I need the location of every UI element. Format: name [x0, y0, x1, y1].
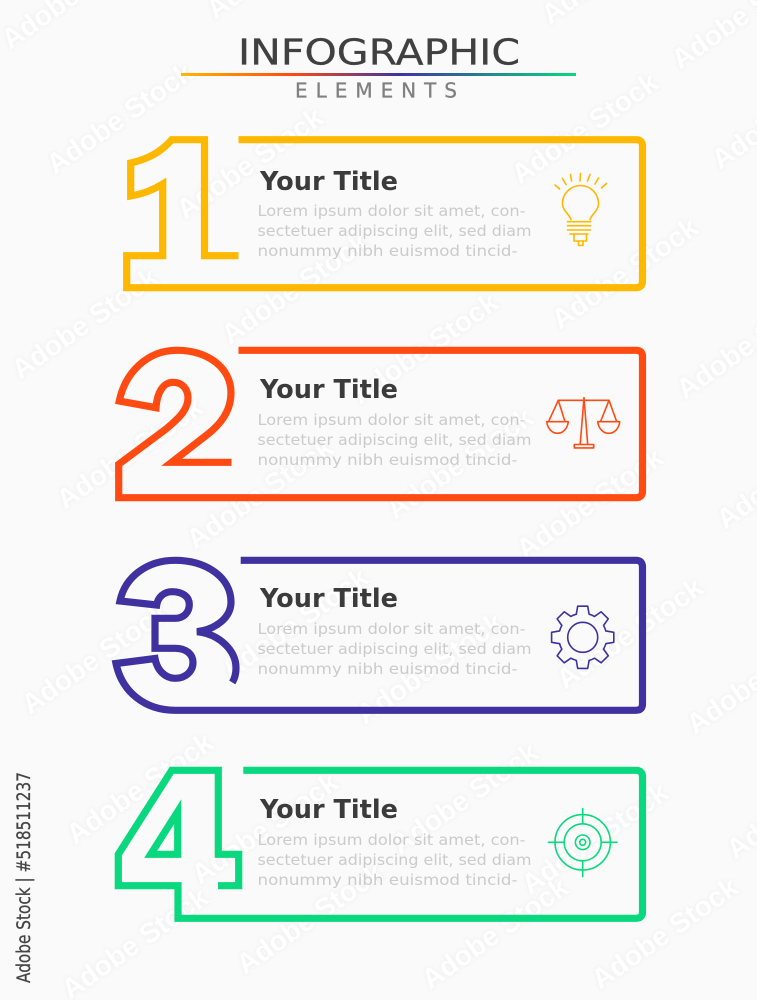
watermark credit: Adobe Stock | #518511237 [14, 772, 35, 983]
text: Adobe Stock [216, 561, 374, 685]
panel 4 title: Your Title [259, 795, 398, 825]
icon: light bulb [555, 174, 606, 246]
text: Adobe Stock [346, 286, 504, 410]
text: Adobe Stock [51, 391, 209, 515]
panel 1 [127, 140, 642, 288]
number 1 and frame outline [127, 140, 642, 288]
panel 2 [119, 350, 642, 498]
title block [181, 32, 576, 102]
text: Adobe Stock [171, 101, 329, 225]
panel 1 body text: nonummy nibh euismod tincid- [258, 242, 518, 260]
text: Adobe Stock [511, 441, 669, 565]
icon: target [548, 808, 617, 876]
panel 3 body text: sectetuer adipiscing elit, sed diam [258, 640, 532, 658]
panel 1 body text: sectetuer adipiscing elit, sed diam [258, 222, 532, 240]
text: Adobe Stock [546, 211, 704, 335]
panel 2 body text: nonummy nibh euismod tincid- [258, 451, 518, 469]
number 4 and frame outline [118, 770, 643, 918]
number 2 and frame outline [119, 350, 642, 498]
panel 1 title: Your Title [259, 167, 398, 197]
panel 3 title: Your Title [259, 584, 398, 614]
number 3 and frame outline [116, 560, 642, 710]
text: Adobe Stock [381, 401, 539, 525]
text: Adobe Stock [586, 871, 744, 995]
panel 1 body text: Lorem ipsum dolor sit amet, con- [258, 202, 526, 220]
panel 2 body text: sectetuer adipiscing elit, sed diam [258, 431, 532, 449]
text: Adobe Stock [16, 596, 174, 720]
panel 3 [116, 560, 642, 710]
text: Adobe Stock [61, 726, 219, 850]
panel 3 body text: Lorem ipsum dolor sit amet, con- [258, 620, 526, 638]
panel 3 body text [258, 620, 532, 678]
text: Adobe Stock [231, 856, 389, 980]
text: Adobe Stock [351, 606, 509, 730]
panel 4 body text [258, 831, 532, 889]
text: Adobe Stock [516, 776, 674, 900]
heading: INFOGRAPHIC: INFOGRAPHIC [238, 32, 520, 74]
text: Adobe Stock [6, 261, 164, 385]
text: Adobe Stock [386, 736, 544, 860]
panel 4 [118, 770, 643, 918]
icon: gear [552, 606, 614, 668]
text: Adobe Stock [551, 571, 709, 695]
text: Adobe Stock [181, 431, 339, 555]
panel 2 title: Your Title [259, 375, 398, 405]
text: Adobe Stock [41, 56, 199, 180]
panel 4 body text: sectetuer adipiscing elit, sed diam [258, 851, 532, 869]
panel 2 body text: Lorem ipsum dolor sit amet, con- [258, 411, 526, 429]
subheading: ELEMENTS: ELEMENTS [295, 78, 457, 102]
text: Adobe Stock [216, 226, 374, 350]
panel 3 body text: nonummy nibh euismod tincid- [258, 660, 518, 678]
panel 1 body text [258, 202, 532, 260]
panel 4 body text: Lorem ipsum dolor sit amet, con- [258, 831, 526, 849]
icon: scales [547, 398, 620, 448]
gradient rule [181, 73, 576, 76]
text: Adobe Stock [186, 766, 344, 890]
panel 4 body text: nonummy nibh euismod tincid- [258, 871, 518, 889]
number 4 inner triangle [151, 812, 178, 854]
text: Adobe Stock [506, 66, 664, 190]
text: Adobe Stock [416, 871, 574, 995]
panel 2 body text [258, 411, 532, 469]
